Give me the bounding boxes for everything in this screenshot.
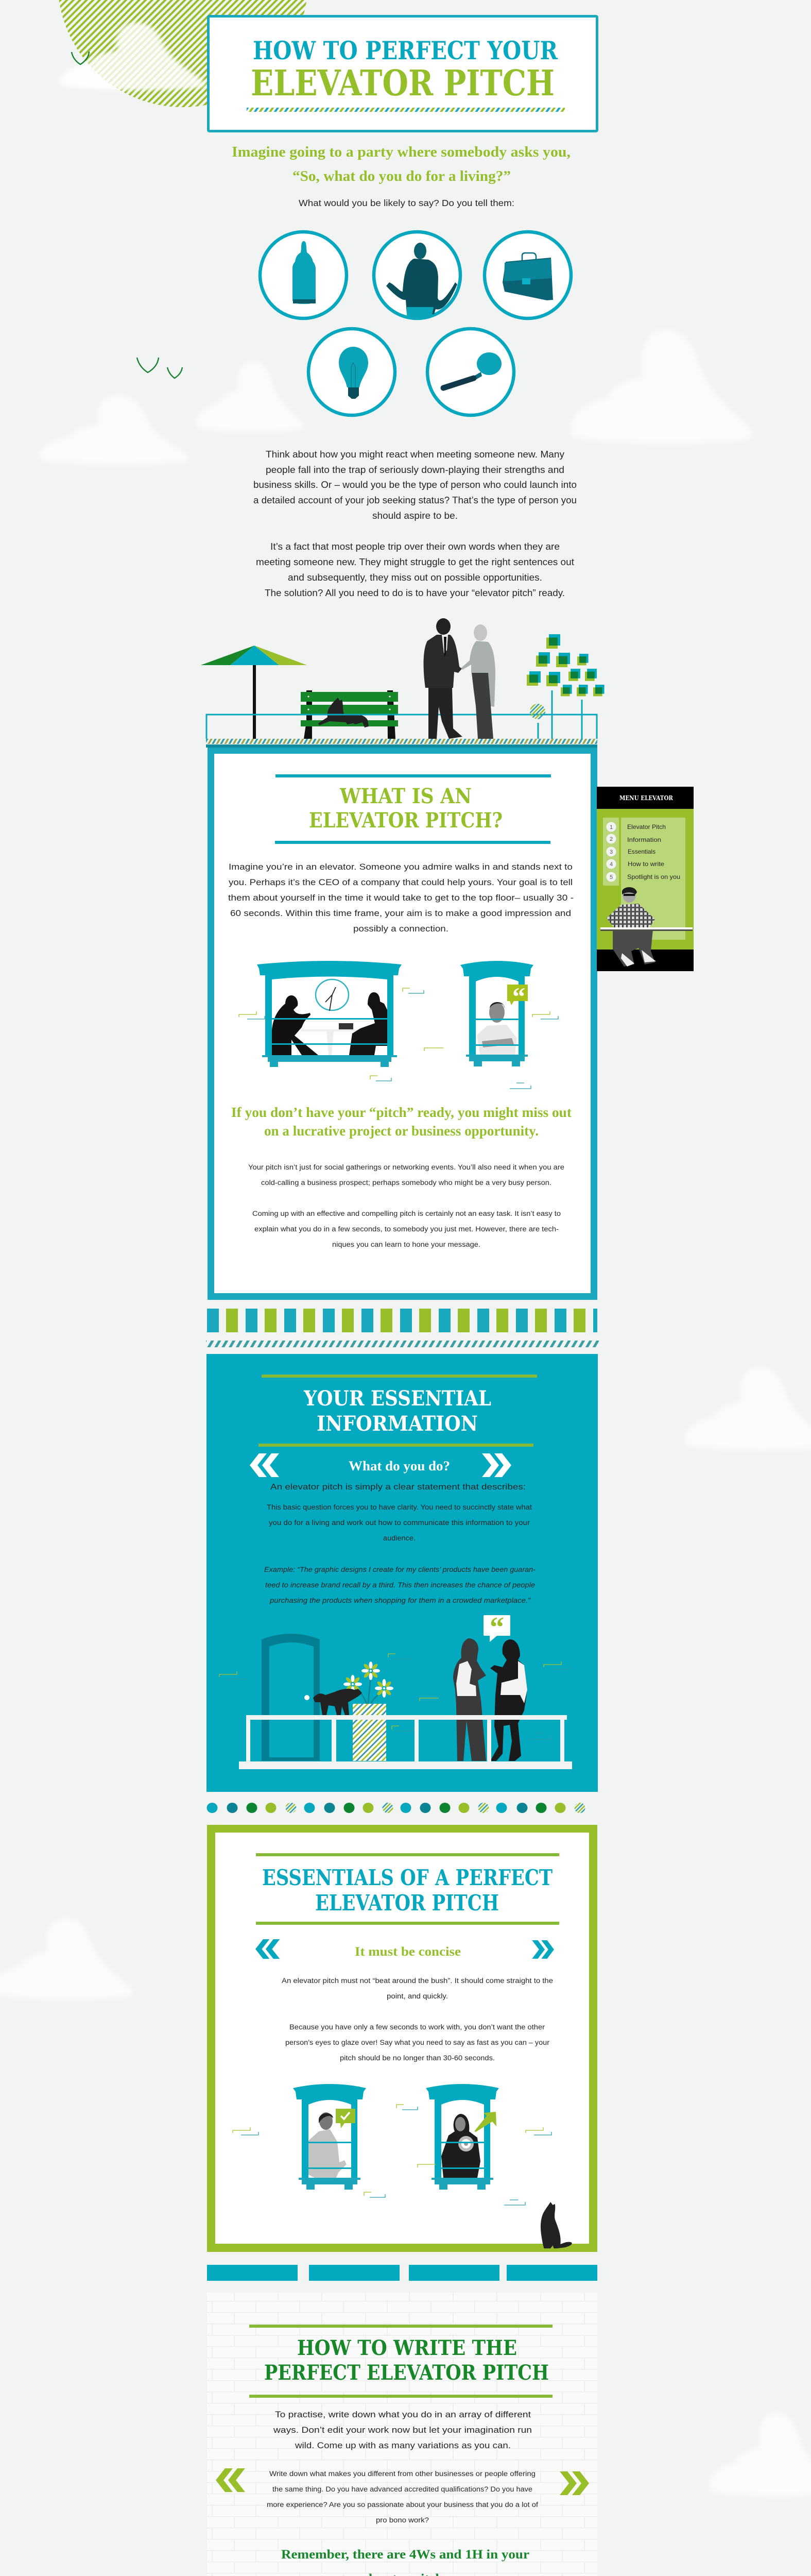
intro paragraph 2: and subsequently, they miss out on possible opportunities. (288, 572, 542, 583)
title box (208, 16, 597, 131)
black cat (541, 2202, 572, 2248)
window: bearded man: “ (512, 982, 525, 1011)
body text: you do for a living and work out how to communicate this information to your (269, 1519, 530, 1527)
vase with flowers (343, 1662, 393, 1761)
brick marks (239, 988, 558, 1089)
man at table (349, 992, 387, 1055)
rule (258, 1444, 533, 1447)
example text: purchasing the products when shopping for them in a crowded marketplace.” (269, 1597, 531, 1604)
heading: YOUR ESSENTIAL (303, 1386, 491, 1411)
body text: them about yourself in the time it would take to get to the top floor– usually 30 - (228, 893, 574, 903)
subheading: It must be concise (355, 1945, 461, 1959)
colour bars (207, 1309, 597, 1332)
menu items: How to write (628, 860, 664, 868)
body text: point, and quickly. (387, 1992, 448, 2000)
title striped rule (247, 108, 565, 112)
menu items: 2 (610, 836, 613, 842)
panel: how to write the perfect elevator pitch (206, 2293, 597, 2576)
student sitting (607, 887, 656, 967)
rule (256, 1853, 559, 1856)
subheading: What do you do? (349, 1459, 450, 1473)
panel: how to write the perfect elevator pitch: PERFECT ELEVATOR PITCH (264, 2361, 549, 2385)
window: bearded man (460, 961, 533, 1066)
older man (461, 624, 495, 739)
dot row (207, 1803, 585, 1813)
body text: you. Perhaps it’s the CEO of a company that could help yours. Your goal is to tell (229, 877, 573, 887)
intro paragraph 1 (253, 449, 577, 521)
example text: Example: “The graphic designs I create for my clients’ products have been guaran- (264, 1566, 536, 1573)
intro paragraph 1: Think about how you might react when meeting someone new. Many (266, 449, 564, 460)
body text lower (248, 1163, 564, 1248)
heading: ESSENTIALS OF A PERFECT (262, 1865, 553, 1890)
intro green lines: “So, what do you do for a living?” (292, 168, 511, 184)
speech bubble (484, 1612, 510, 1643)
green subheading: Remember, there are 4Ws and 1H in your (281, 2548, 529, 2562)
menu items: 3 (610, 849, 613, 855)
body text: pro bono work? (376, 2516, 429, 2524)
body text (282, 1977, 553, 2062)
brick marks (233, 2105, 551, 2205)
teal bars (207, 2265, 597, 2281)
intro text: To practise, write down what you do in an array of different (275, 2410, 531, 2419)
two women talking (453, 1638, 527, 1761)
chevrons (216, 2468, 245, 2492)
intro paragraph 2: The solution? All you need to do is to have your “elevator pitch” ready. (265, 588, 565, 598)
intro paragraph 2 (256, 541, 574, 598)
body text: Because you have only a few seconds to work with, you don’t want the other (289, 2023, 545, 2031)
rooftop scene (201, 618, 605, 748)
sun: striped circle (58, 0, 308, 107)
menu items: 1 (610, 824, 613, 831)
question line: What would you be likely to say? Do you tell them: (299, 198, 514, 208)
body text (267, 1483, 532, 1542)
body text lower: Coming up with an effective and compelling pitch is certainly not an easy task. It isn’t easy to (252, 1210, 561, 1217)
bench with cat (301, 690, 398, 739)
chevrons (250, 1453, 279, 1477)
menu items: 4 (610, 861, 613, 868)
panel: essentials of a perfect elevator pitch (207, 1825, 597, 2252)
man in suit (424, 618, 462, 739)
body text: Write down what makes you different from other businesses or people offering (269, 2470, 536, 2478)
body text: An elevator pitch is simply a clear statement that describes: (270, 1483, 526, 1492)
title line 2: ELEVATOR PITCH (251, 63, 555, 104)
circle: light bulb (308, 329, 395, 415)
title line 1: HOW TO PERFECT YOUR (253, 36, 558, 65)
body text: person’s eyes to glaze over! Say what you need to say as fast as you can – your (285, 2039, 550, 2046)
menu title: MENU ELEVATOR (619, 794, 674, 802)
menu items (607, 822, 680, 882)
clock (316, 979, 349, 1010)
shelf (600, 927, 693, 929)
rule (249, 2395, 553, 2398)
heading: WHAT IS AN (339, 784, 472, 808)
speech bubble (507, 985, 528, 1005)
railing (206, 715, 597, 739)
door (262, 1634, 320, 1761)
woman at table (272, 995, 318, 1055)
body text: pitch should be no longer than 30-60 seconds. (340, 2054, 495, 2062)
intro paragraph 1: a detailed account of your job seeking status? That’s the type of person you (253, 495, 577, 505)
roof edge (206, 744, 597, 748)
speech bubble: “ (490, 1612, 504, 1643)
body text (267, 2470, 538, 2524)
body text (228, 862, 574, 934)
panel: what is an elevator pitch: ELEVATOR PITCH? (309, 808, 503, 833)
rule (262, 1375, 537, 1378)
intro paragraph 2: It’s a fact that most people trip over their own words when they are (270, 541, 560, 552)
body text: This basic question forces you to have clarity. You need to succinctly state what (267, 1503, 532, 1511)
body text: the same thing. Do you have advanced accredited qualifications? Do you have (272, 2485, 532, 2493)
green callout: If you don’t have your “pitch” ready, you might miss out (231, 1105, 572, 1120)
intro paragraph 1: should aspire to be. (372, 511, 458, 521)
rule (249, 2325, 553, 2328)
green callout (231, 1105, 572, 1139)
chevrons (255, 1939, 280, 1959)
body text: An elevator pitch must not “beat around the bush”. It should come straight to the (282, 1977, 553, 1985)
body text: 60 seconds. Within this time frame, your aim is to make a good impression and (230, 908, 571, 918)
panel: what is an elevator pitch (208, 748, 597, 1300)
circle: bottle (260, 232, 347, 318)
menu items: Elevator Pitch (627, 823, 666, 831)
window: meeting at table (257, 961, 402, 1067)
umbrella (201, 646, 307, 739)
menu items: Information (627, 836, 661, 843)
panel: your essential information: INFORMATION (317, 1412, 478, 1436)
body text lower: Your pitch isn’t just for social gatherings or networking events. You’ll also need it when you are (248, 1163, 564, 1171)
walking cat (304, 1689, 362, 1715)
circle: magnifying glass (427, 329, 514, 415)
intro paragraph 1: people fall into the trap of seriously down-playing their strengths and (266, 465, 564, 475)
birds (72, 52, 182, 378)
rule (256, 1922, 559, 1925)
intro green lines (232, 144, 571, 184)
table (301, 1029, 367, 1055)
body text lower: explain what you do in a few seconds, to somebody you just met. However, there are tech- (254, 1225, 559, 1233)
window: woman with target (426, 2084, 499, 2190)
intro text: ways. Don’t edit your work now but let your imagination run (273, 2426, 532, 2435)
cloud over sun (61, 23, 205, 90)
heading rule (275, 774, 551, 777)
body text: Imagine you’re in an elevator. Someone you admire walks in and stands next to (229, 862, 573, 872)
body text: audience. (383, 1534, 416, 1542)
pixel tree (527, 634, 605, 739)
body text lower: cold-calling a business prospect; perhaps somebody who might be a very busy person. (261, 1179, 551, 1187)
balcony railing (239, 1715, 572, 1769)
body text: more experience? Are you so passionate about your business that you do a lot of (267, 2501, 538, 2509)
green subheading (281, 2548, 529, 2576)
body text: possibly a connection. (353, 924, 448, 934)
intro green lines: Imagine going to a party where somebody asks you, (232, 144, 571, 160)
teal stripe band (206, 1341, 599, 1347)
intro text (273, 2410, 532, 2450)
heading: HOW TO WRITE THE (297, 2336, 517, 2360)
green callout: on a lucrative project or business opportunity. (264, 1123, 539, 1139)
menu items: Spotlight is on you (627, 873, 680, 880)
example text (264, 1566, 536, 1604)
menu items: 5 (610, 874, 613, 880)
heading rule (275, 841, 550, 844)
circle: briefcase (485, 232, 571, 318)
panel: menu elevator (597, 787, 694, 971)
intro paragraph 1: business skills. Or – would you be the type of person who could launch into (253, 480, 577, 490)
roof stripes (206, 739, 597, 744)
window bars (272, 1018, 387, 1020)
window: man with phone (293, 2084, 366, 2190)
circle: shrugging man (374, 232, 460, 318)
panel: your essential information (206, 1354, 598, 1792)
brick marks (219, 1654, 570, 1739)
panel: essentials of a perfect elevator pitch: ELEVATOR PITCH (315, 1890, 499, 1916)
menu items: Essentials (628, 848, 655, 855)
example text: teed to increase brand recall by a third. This then increases the chance of people (265, 1581, 535, 1589)
intro text: wild. Come up with as many variations as you can. (295, 2441, 511, 2450)
intro paragraph 2: meeting someone new. They might struggle to get the right sentences out (256, 557, 574, 567)
body text lower: niques you can learn to hone your message. (332, 1241, 480, 1248)
